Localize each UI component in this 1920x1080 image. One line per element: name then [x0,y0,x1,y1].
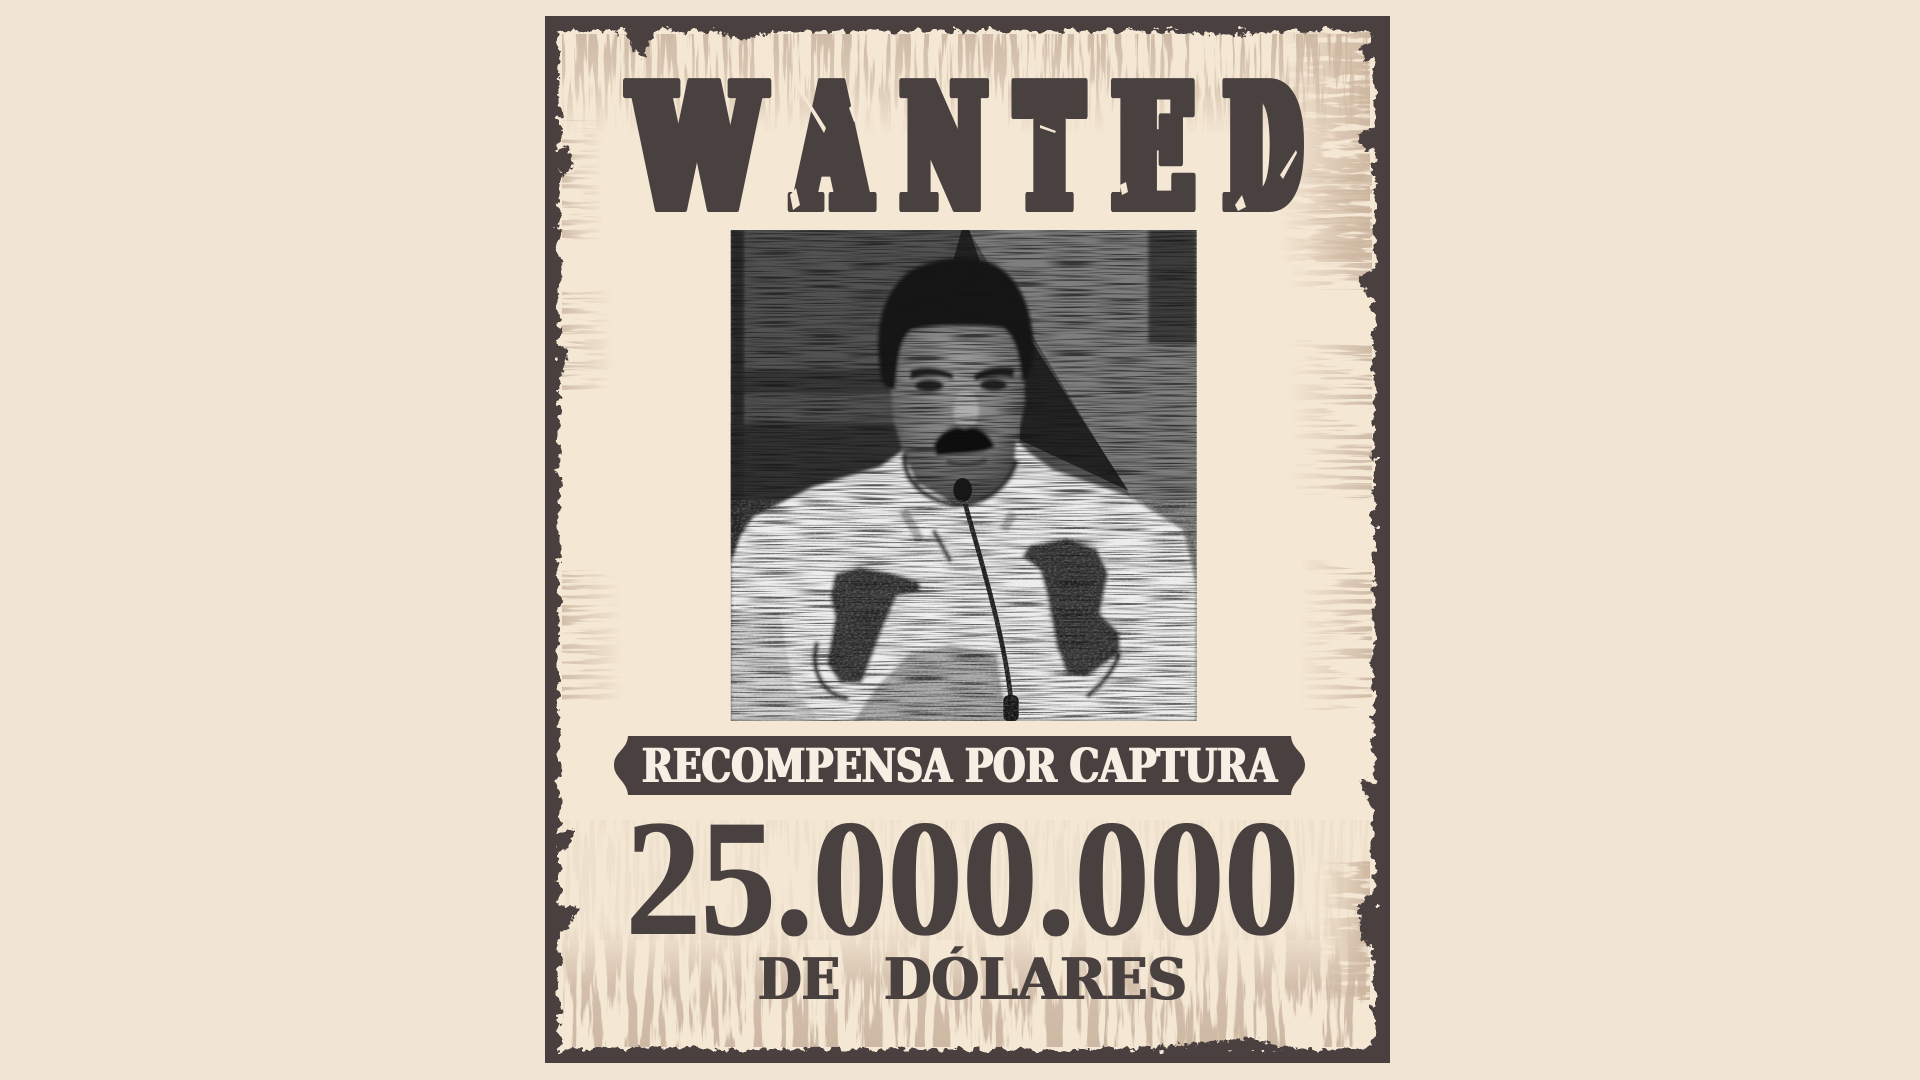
title: WANTED: N [904,48,984,248]
photo scanlines [731,230,1197,721]
microphone [953,478,1019,722]
torn edge blotches [556,28,1378,1052]
aged paper [556,28,1378,1052]
title: WANTED: A [796,48,868,248]
title: WANTED: T [1019,48,1080,248]
photo background [731,230,1197,721]
title: WANTED [632,48,1299,248]
shirt shadow at waist [853,645,1007,721]
collar [903,510,1013,540]
eyebrows and eyes [910,367,953,380]
wanted poster [545,16,1390,1063]
currency label [758,945,1187,1013]
face [890,327,1025,503]
title: WANTED: E [1115,48,1192,248]
hair [878,258,1034,390]
wanted poster: D [1227,48,1299,248]
currency label: DÓLARES [884,945,1187,1013]
paper stains [562,32,1372,1047]
flag triangle [953,230,1128,491]
mouth [947,460,987,464]
neck shadow [904,453,1017,505]
currency label: DE [758,946,840,1013]
nose highlight [953,391,979,429]
cuffs [815,642,848,698]
photo: man at microphone [731,230,1197,722]
title distress marks [790,84,1297,211]
reward banner [614,736,1305,795]
shirt [731,440,1197,721]
photo grain [731,500,1197,721]
banner shape [614,736,1305,795]
moustache [933,427,995,456]
title: WANTED: W [632,48,762,248]
banner text: RECOMPENSA POR CAPTURA [642,739,1277,794]
poster frame [545,16,1390,1063]
left hand [827,567,920,683]
reward amount: 25.000.000 [626,786,1299,971]
right hand [1022,538,1120,677]
